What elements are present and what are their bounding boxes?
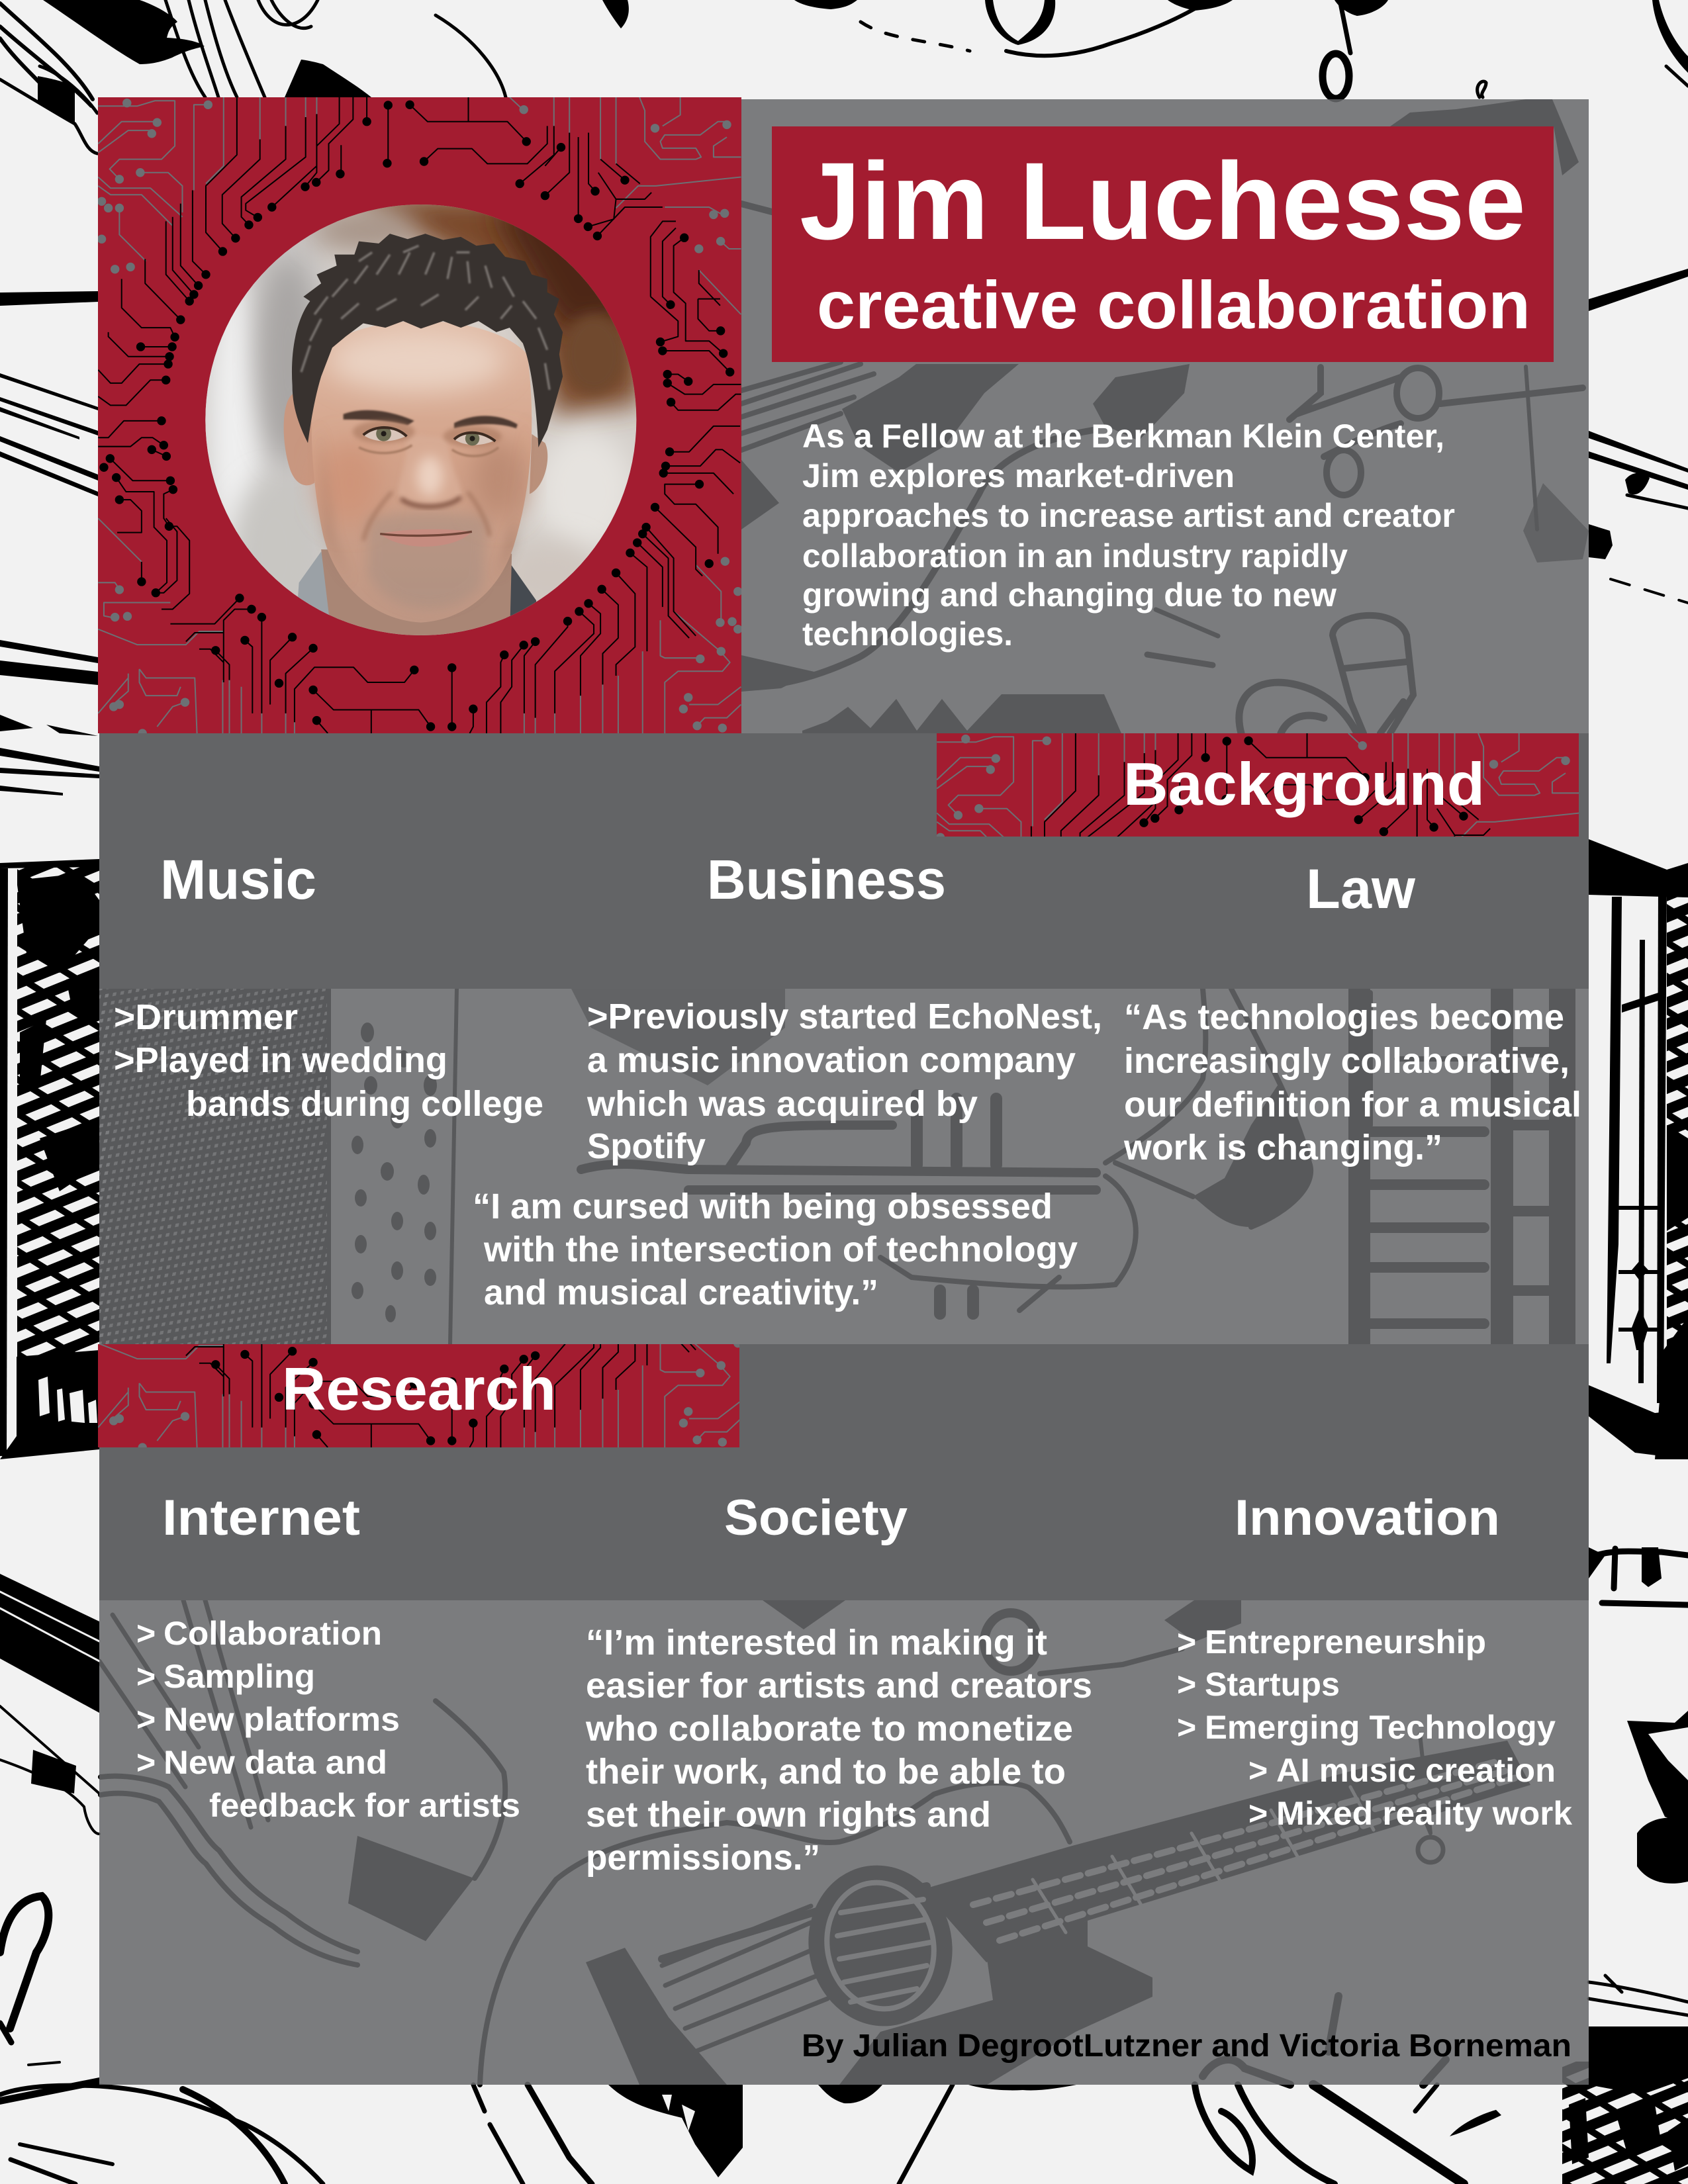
column: business: Spotify bbox=[587, 1126, 706, 1166]
accordion hatching bbox=[8, 867, 331, 1449]
research column headings: Internet bbox=[162, 1490, 360, 1546]
column: internet list: > bbox=[136, 1744, 156, 1781]
column: music: >Played in wedding bbox=[114, 1040, 447, 1080]
column: internet list: feedback for artists bbox=[209, 1787, 520, 1824]
in-panel line work bbox=[741, 362, 874, 450]
name: Jim Luchesse bbox=[800, 140, 1526, 263]
intro paragraph bbox=[802, 418, 1455, 653]
column: society quote: set their own rights and bbox=[586, 1795, 991, 1835]
column: music bbox=[114, 997, 543, 1124]
band: research section dark bbox=[99, 1344, 1589, 1600]
ears bbox=[284, 394, 314, 485]
centre quote: “I am cursed with being obsessed bbox=[473, 1187, 1053, 1226]
eyebrows bbox=[344, 410, 414, 426]
column: law quote: “As technologies become bbox=[1124, 997, 1564, 1037]
main guitar bbox=[586, 1948, 727, 2085]
column: internet list: > bbox=[136, 1658, 156, 1695]
column: business bbox=[586, 997, 1102, 1166]
column: business: a music innovation company bbox=[587, 1040, 1076, 1080]
column: society quote: their work, and to be able to bbox=[586, 1752, 1066, 1792]
top left instrument band bbox=[38, 76, 75, 124]
intro paragraph: growing and changing due to new bbox=[802, 576, 1336, 614]
column: innovation list: Mixed reality work bbox=[1276, 1795, 1572, 1832]
shirt bbox=[298, 552, 343, 621]
column: innovation list: > bbox=[1248, 1752, 1268, 1789]
research column headings: Innovation bbox=[1235, 1490, 1500, 1546]
column: society quote: easier for artists and creators bbox=[586, 1666, 1092, 1706]
intro paragraph: technologies. bbox=[802, 615, 1013, 653]
column: society quote bbox=[585, 1623, 1092, 1878]
column: innovation list: Startups bbox=[1205, 1666, 1340, 1703]
research column headings bbox=[162, 1490, 1500, 1546]
in-panel silhouettes bbox=[802, 694, 1121, 733]
column: internet list: > bbox=[136, 1701, 156, 1738]
column: society quote: who collaborate to monetize bbox=[585, 1709, 1073, 1749]
column: innovation list: AI music creation bbox=[1276, 1752, 1556, 1789]
heading band: Research: Research bbox=[282, 1356, 556, 1423]
column: internet list: Sampling bbox=[164, 1658, 315, 1695]
byline: By Julian DegrootLutzner and Victoria Borneman bbox=[802, 2028, 1571, 2064]
column: internet list bbox=[136, 1615, 520, 1824]
column: music: >Drummer bbox=[114, 997, 298, 1037]
column: music: bands during college bbox=[186, 1084, 543, 1124]
title box bbox=[772, 126, 1554, 362]
intro paragraph: collaboration in an industry rapidly bbox=[802, 537, 1348, 574]
light details on sketches bbox=[662, 940, 1609, 2131]
subtitle: creative collaboration bbox=[817, 267, 1530, 343]
column: innovation list: > bbox=[1177, 1709, 1196, 1746]
background column headings bbox=[160, 848, 1416, 920]
background column headings: Business bbox=[707, 848, 946, 911]
neck bbox=[321, 549, 512, 643]
background column headings: Law bbox=[1306, 858, 1416, 920]
centre quote: with the intersection of technology bbox=[483, 1230, 1078, 1269]
column: law quote: increasingly collaborative, bbox=[1124, 1041, 1570, 1081]
column: internet list: > bbox=[136, 1615, 156, 1652]
nose bbox=[399, 439, 461, 504]
heading band: Research bbox=[98, 811, 741, 1447]
column: society quote: “I’m interested in making it bbox=[586, 1623, 1047, 1662]
panel: circuit board portrait frame bbox=[98, 97, 741, 733]
hair bbox=[292, 234, 563, 447]
portrait photo bbox=[199, 195, 643, 643]
column: innovation list bbox=[1177, 1623, 1572, 1832]
column: innovation list: > bbox=[1248, 1795, 1268, 1832]
right keyboard hatching bbox=[1562, 887, 1688, 2184]
column: law quote bbox=[1123, 997, 1581, 1167]
intro paragraph: approaches to increase artist and creator bbox=[802, 497, 1455, 534]
intro paragraph: Jim explores market-driven bbox=[802, 457, 1235, 494]
research column headings: Society bbox=[724, 1490, 908, 1546]
face bbox=[311, 321, 532, 623]
intro paragraph: As a Fellow at the Berkman Klein Center, bbox=[802, 418, 1444, 455]
column: business: >Previously started EchoNest, bbox=[587, 997, 1102, 1036]
column: internet list: New platforms bbox=[164, 1701, 400, 1738]
column: internet list: New data and bbox=[164, 1744, 387, 1781]
column: innovation list: > bbox=[1177, 1623, 1196, 1661]
trumpet bbox=[581, 1125, 1096, 1190]
band: background section dark bbox=[99, 733, 1589, 989]
column: innovation list: > bbox=[1177, 1666, 1196, 1703]
column: innovation list: Entrepreneurship bbox=[1205, 1623, 1486, 1661]
centre quote: and musical creativity.” bbox=[484, 1273, 878, 1312]
accordion spots bbox=[352, 1023, 437, 1322]
heading band: Background bbox=[937, 733, 1579, 1369]
background column headings: Music bbox=[160, 848, 316, 911]
column: internet list: Collaboration bbox=[164, 1615, 382, 1652]
column: law quote: work is changing.” bbox=[1123, 1128, 1442, 1167]
heading band: Background: Background bbox=[1123, 751, 1485, 818]
column: business: which was acquired by bbox=[586, 1084, 978, 1124]
column: society quote: permissions.” bbox=[586, 1838, 820, 1878]
column: innovation list: Emerging Technology bbox=[1205, 1709, 1556, 1746]
centre quote bbox=[473, 1187, 1078, 1312]
mouth bbox=[380, 529, 472, 547]
eyes bbox=[353, 420, 414, 443]
column: law quote: our definition for a musical bbox=[1124, 1085, 1581, 1124]
